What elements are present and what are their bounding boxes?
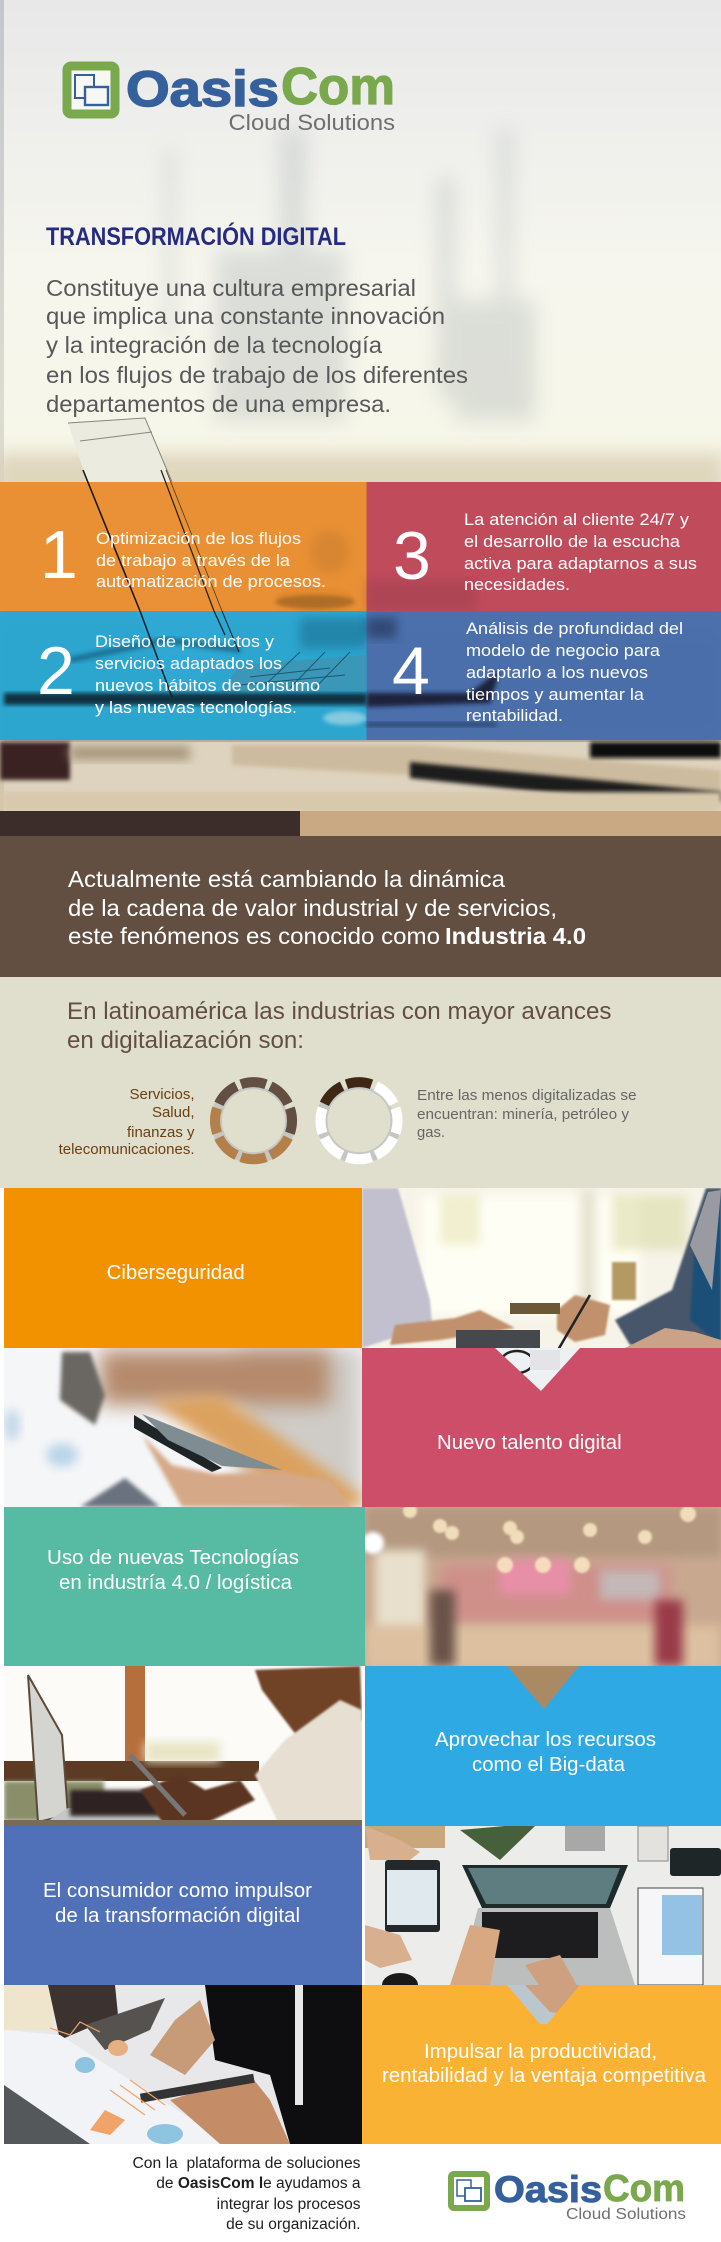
panel: Industria 4.0 statement (0, 836, 721, 977)
panel: Uso de nuevas Tecnologías: en industría 4.0 / logística (59, 1572, 293, 1594)
panel: Industria 4.0 statement: este fenómenos es conocido como (68, 923, 440, 949)
panel: Aprovechar los recursos: como el Big-data (472, 1754, 626, 1776)
panel: Aprovechar los recursos (365, 1666, 721, 1826)
panel: Ciberseguridad: Ciberseguridad (107, 1262, 245, 1284)
panel: El consumidor como impulsor: El consumidor como impulsor (43, 1880, 312, 1902)
photo: blurred shopping mall bokeh (362, 1504, 721, 1709)
logo: OasisCom Cloud Solutions: Oasis (126, 61, 279, 117)
footer text: integrar los procesos (217, 2196, 361, 2213)
intro text: en los flujos de trabajo de los diferentes (46, 362, 468, 388)
panel: point 4: adaptarlo a los nuevos (466, 663, 648, 682)
footer text (132, 2155, 361, 2233)
panel: point 2: y las nuevas tecnologías. (95, 698, 297, 717)
photo: hand holding smartphone (4, 1348, 362, 1507)
logo: OasisCom Cloud Solutions (67, 58, 395, 135)
footer logo: OasisCom Cloud Solutions: Com (603, 2168, 685, 2210)
least digitalized industries note: Entre las menos digitalizadas se (417, 1087, 636, 1104)
donut chart: least digitalized (320, 1082, 398, 1160)
panel: point 4: 4 (392, 633, 430, 709)
photo: office meeting with calculator (362, 1188, 721, 1391)
footer logo: OasisCom Cloud Solutions: Oasis (494, 2169, 602, 2210)
footer logo: OasisCom Cloud Solutions (451, 2168, 686, 2223)
panel: point 4: rentabilidad. (466, 706, 563, 725)
blurred notebook on desk (0, 742, 721, 812)
panel: point 2: Diseño de productos y (95, 632, 275, 651)
most digitalized industries list: telecomunicaciones. (59, 1141, 194, 1158)
panel: Uso de nuevas Tecnologías: Uso de nuevas Tecnologías (47, 1547, 299, 1569)
intro text: y la integración de la tecnología (46, 332, 382, 358)
panel: point 1: automatización de procesos. (96, 572, 326, 591)
background photo: blurred skyline and desk with laptop (0, 0, 721, 836)
panel: point 2 (0, 611, 367, 740)
intro text: departamentos de una empresa. (46, 391, 391, 417)
least digitalized industries note: encuentran: minería, petróleo y (417, 1106, 630, 1123)
most digitalized industries list: Servicios, (129, 1086, 194, 1103)
donut chart: most digitalized (214, 1082, 293, 1160)
panel: Nuevo talento digital: Nuevo talento digital (437, 1432, 622, 1454)
intro text (46, 275, 468, 417)
panel: Industria 4.0 statement: de la cadena de valor industrial y de servicios, (68, 895, 557, 921)
least digitalized industries note: gas. (417, 1124, 445, 1141)
laptop in the background (68, 418, 172, 482)
panel: point 1: Optimización de los flujos (96, 529, 301, 548)
heading: en digitaliazación son: (67, 1027, 304, 1054)
panel: point 3: activa para adaptarnos a sus (464, 554, 697, 573)
panel: point 1: 1 (40, 517, 78, 593)
panel: point 2: 2 (37, 633, 75, 709)
footer text: de OasisCom le ayudamos a (156, 2175, 361, 2192)
panel: point 2: servicios adaptados los (95, 654, 282, 673)
panel: El consumidor como impulsor (4, 1826, 362, 2027)
panel: point 4: Análisis de profundidad del (466, 619, 683, 638)
panel: Impulsar la productividad: rentabilidad y la ventaja competitiva (382, 2065, 707, 2087)
title: TRANSFORMACIÓN DIGITAL (46, 221, 346, 251)
most digitalized industries list: finanzas y (127, 1124, 195, 1141)
heading: En latinoamérica las industrias con mayor avances (67, 998, 612, 1025)
logo: OasisCom Cloud Solutions: Com (281, 58, 395, 116)
panel: El consumidor como impulsor: de la transformación digital (55, 1905, 300, 1927)
footer text: de su organización. (226, 2216, 360, 2233)
panel: point 1: de trabajo a través de la (96, 551, 291, 570)
most digitalized industries list: Salud, (152, 1104, 194, 1121)
panel: point 3: necesidades. (464, 575, 570, 594)
panel: point 4: tiempos y aumentar la (466, 685, 645, 704)
footer text: Con la plataforma de soluciones (132, 2155, 361, 2172)
most digitalized industries list (59, 1086, 195, 1158)
panel: digitalization in Latin America (0, 977, 721, 1188)
heading (67, 998, 612, 1054)
least digitalized industries note (417, 1087, 636, 1141)
intro text: Constituye una cultura empresarial (46, 275, 416, 301)
panel: Industria 4.0 statement: Industria 4.0 (445, 923, 586, 949)
panel: point 3: el desarrollo de la escucha (464, 532, 681, 551)
panel: Ciberseguridad (4, 1188, 362, 1391)
logo: OasisCom Cloud Solutions: Cloud Solutions (228, 110, 395, 135)
panel: point 3 (366, 482, 721, 611)
photo: top view of hands on laptop (365, 1826, 721, 2030)
panel: point 3: La atención al cliente 24/7 y (464, 510, 690, 529)
photo: person with phone at laptop by window (4, 1666, 362, 1826)
panel: point 2: nuevos hábitos de consumo (95, 676, 320, 695)
panel: Impulsar la productividad: Impulsar la productividad, (424, 2041, 657, 2063)
photo: hands pointing at printed charts (4, 1985, 362, 2144)
panel: point 1 (0, 470, 366, 611)
panel: Impulsar la productividad (362, 1985, 721, 2144)
panel: Industria 4.0 statement: Actualmente está cambiando la dinámica (68, 866, 505, 892)
panel: point 4: modelo de negocio para (466, 641, 661, 660)
panel: point 4 (366, 611, 721, 740)
panel: Nuevo talento digital (362, 1348, 721, 1507)
footer logo: OasisCom Cloud Solutions: Cloud Solutions (566, 2206, 686, 2223)
panel: Uso de nuevas Tecnologías (4, 1507, 365, 1709)
panel: Aprovechar los recursos: Aprovechar los recursos (435, 1729, 656, 1751)
intro text: que implica una constante innovación (46, 303, 445, 329)
panel: point 3: 3 (393, 518, 431, 594)
